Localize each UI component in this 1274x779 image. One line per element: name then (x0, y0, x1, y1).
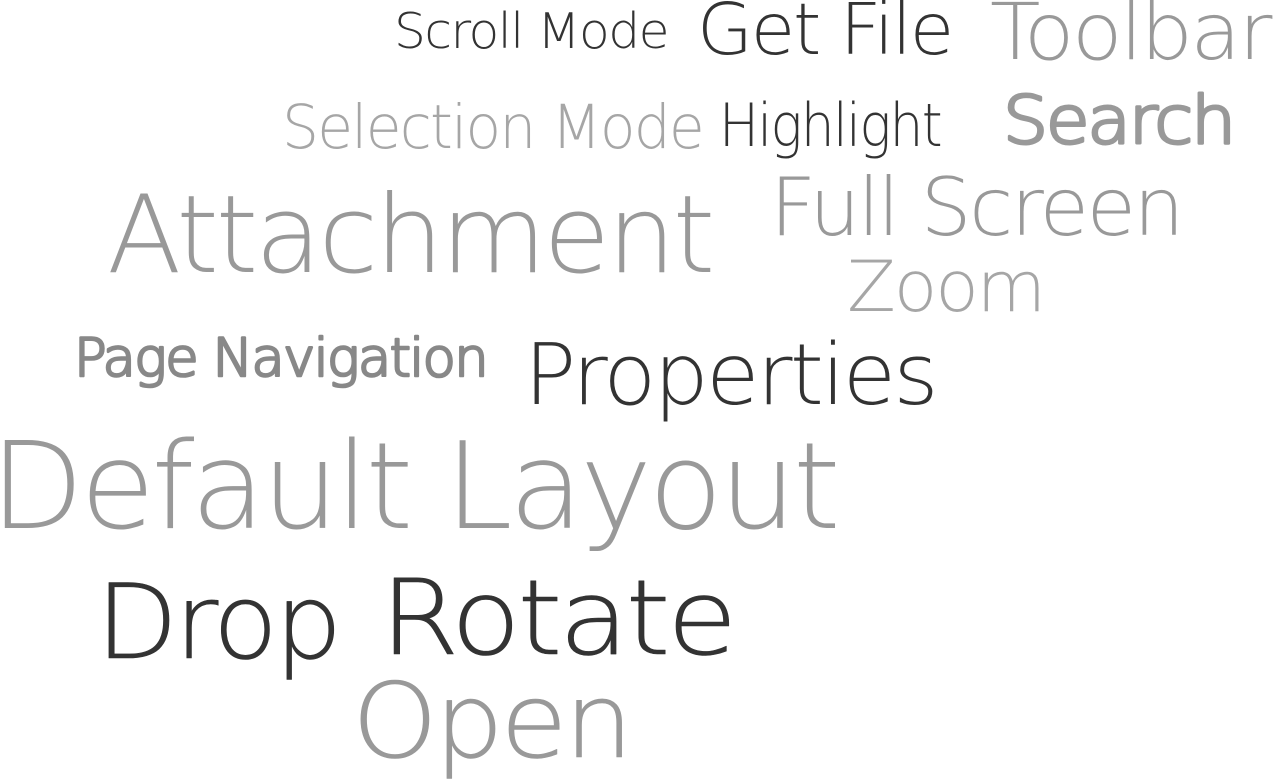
word: Zoom: Zoom (847, 246, 1044, 328)
word: Search: Search (1003, 82, 1234, 159)
word: Properties: Properties (524, 326, 936, 425)
word: Attachment: Attachment (107, 173, 712, 298)
word: Page Navigation: Page Navigation (74, 328, 487, 389)
word: Selection Mode: Selection Mode (282, 92, 703, 163)
word: Full Screen: Full Screen (770, 161, 1182, 254)
word: Scroll Mode: Scroll Mode (394, 3, 668, 60)
word: Highlight: Highlight (719, 91, 941, 161)
word: Rotate: Rotate (380, 557, 734, 679)
word: Open: Open (352, 662, 630, 779)
word: Drop: Drop (96, 563, 339, 683)
word: Default Layout: Default Layout (0, 418, 837, 557)
